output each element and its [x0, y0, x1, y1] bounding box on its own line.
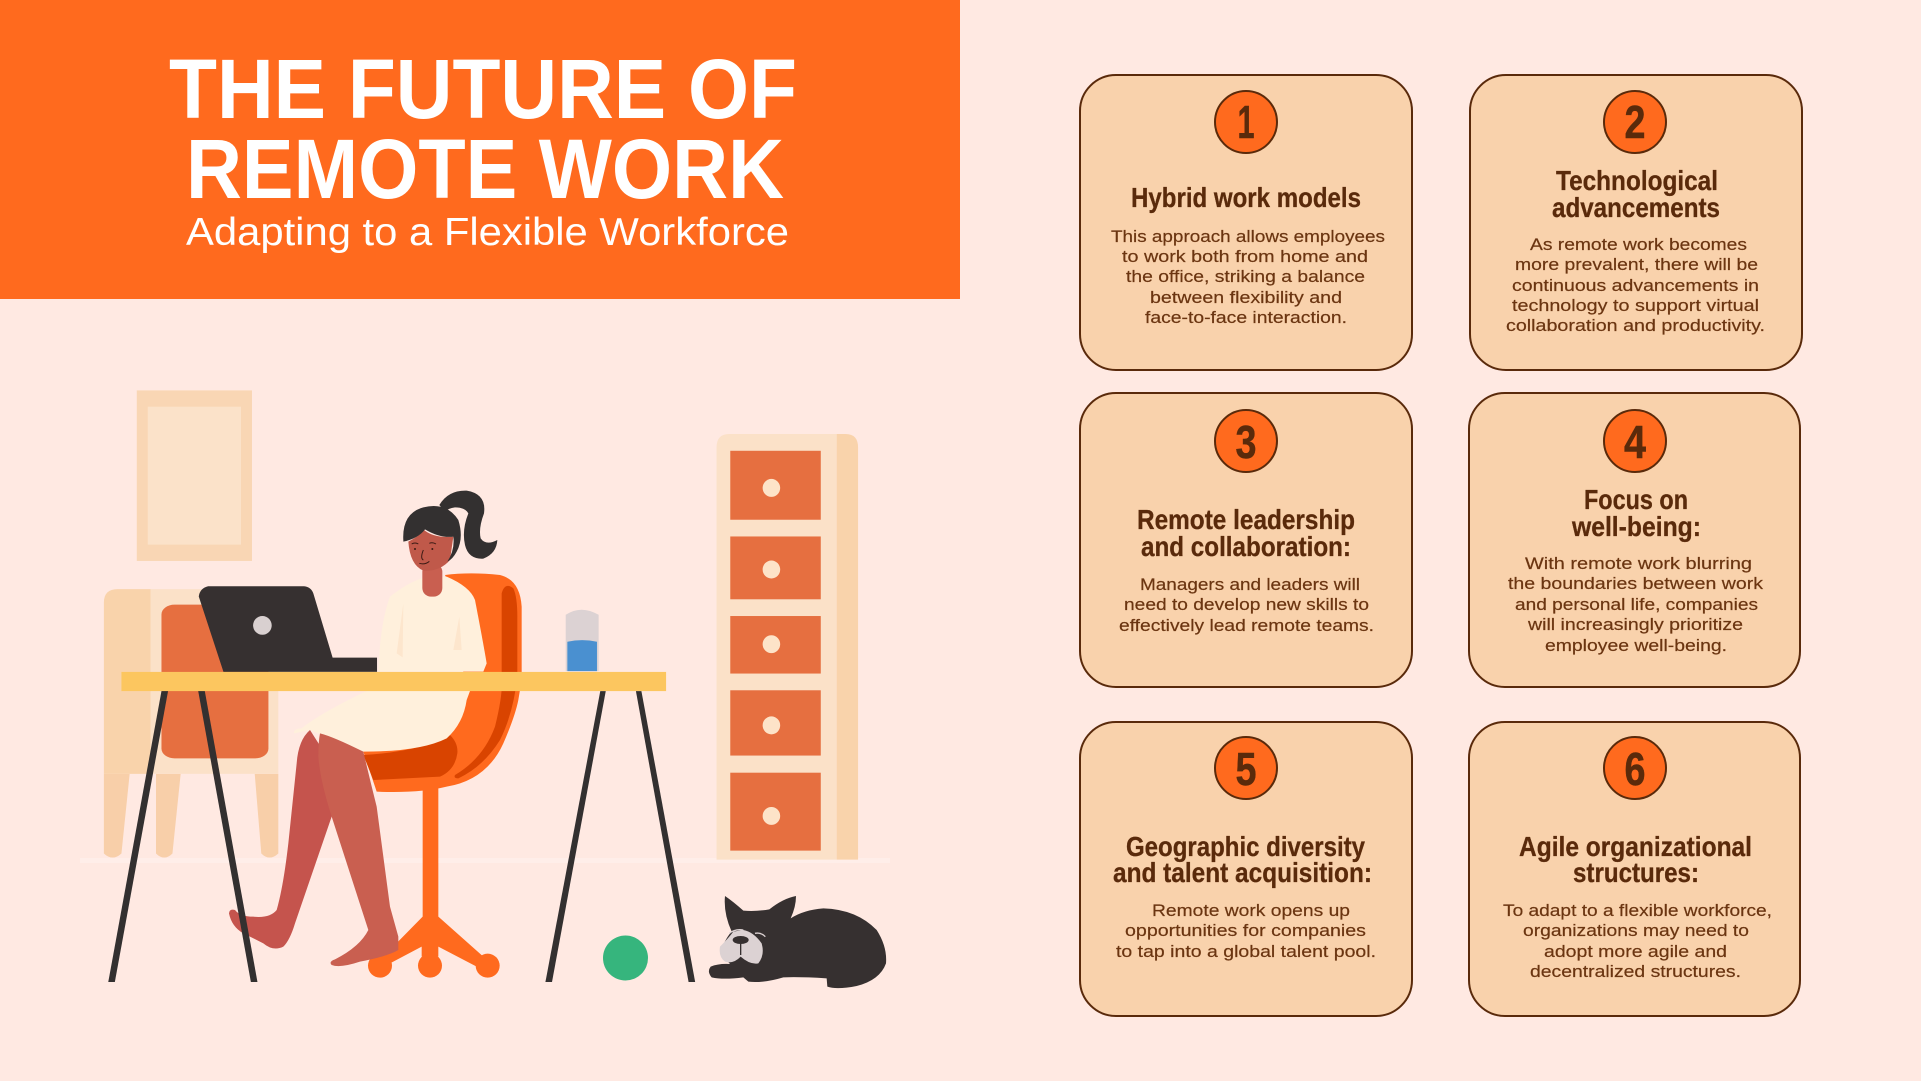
- body text: face-to-face interaction.: [1145, 308, 1347, 327]
- number badge 3: [1215, 410, 1277, 472]
- body text: more prevalent, there will be: [1515, 255, 1758, 274]
- body text: adopt more agile and: [1544, 942, 1727, 961]
- sleeping dog: [709, 896, 886, 988]
- body and legs: [229, 577, 487, 966]
- body text: With remote work blurring: [1525, 554, 1752, 573]
- title: [169, 42, 797, 216]
- body text: [1503, 901, 1772, 981]
- card 2: technological advancements: [1470, 75, 1802, 370]
- desk: [108, 672, 695, 982]
- body text: will increasingly prioritize: [1527, 615, 1743, 634]
- heading: Technological: [1556, 165, 1718, 196]
- heading: well-being:: [1571, 511, 1701, 542]
- body text: collaboration and productivity.: [1506, 316, 1765, 335]
- body text: [1119, 575, 1374, 635]
- heading: [1571, 484, 1701, 542]
- body text: Remote work opens up: [1152, 901, 1350, 920]
- heading: [1552, 165, 1720, 223]
- heading: Geographic diversity: [1126, 831, 1365, 862]
- body text: technology to support virtual: [1512, 296, 1759, 315]
- water glass: [566, 610, 599, 671]
- heading: [1519, 831, 1752, 888]
- number badge 6: [1604, 737, 1666, 799]
- number badge 4: [1604, 410, 1666, 472]
- drawer cabinet: [717, 434, 858, 860]
- wall frame: [137, 390, 252, 561]
- body text: opportunities for companies: [1125, 921, 1366, 940]
- title: THE FUTURE OF: [169, 42, 797, 136]
- number badge 1: [1215, 91, 1277, 153]
- number badge 2: 2: [1624, 96, 1646, 148]
- number badge 5: [1215, 737, 1277, 799]
- card 3: remote leadership: [1080, 393, 1412, 687]
- heading: advancements: [1552, 192, 1720, 223]
- body text: and personal life, companies: [1515, 595, 1758, 614]
- body text: Managers and leaders will: [1140, 575, 1360, 594]
- heading: and collaboration:: [1141, 531, 1351, 562]
- header banner: [0, 0, 960, 299]
- body text: to work both from home and: [1122, 247, 1368, 266]
- card 1: hybrid work models: [1080, 75, 1412, 370]
- body text: [1116, 901, 1376, 961]
- illustration: woman working from home: [80, 390, 890, 988]
- body text: organizations may need to: [1523, 921, 1749, 940]
- heading: structures:: [1573, 857, 1699, 888]
- body text: To adapt to a flexible workforce,: [1503, 901, 1772, 920]
- heading: Agile organizational: [1519, 831, 1752, 862]
- body text: the office, striking a balance: [1126, 267, 1365, 286]
- number badge 5: 5: [1236, 743, 1256, 795]
- heading: [1113, 831, 1372, 888]
- heading: Hybrid work models: [1131, 182, 1361, 213]
- body text: [1111, 227, 1385, 327]
- subtitle: Adapting to a Flexible Workforce: [186, 211, 789, 254]
- laptop: [199, 586, 377, 672]
- body text: [1508, 554, 1764, 655]
- body text: As remote work becomes: [1530, 235, 1747, 254]
- heading: Focus on: [1584, 484, 1688, 515]
- body text: to tap into a global talent pool.: [1116, 942, 1376, 961]
- number badge 1: 1: [1238, 96, 1254, 148]
- body text: the boundaries between work: [1508, 574, 1764, 593]
- card 5: geographic diversity: [1080, 722, 1412, 1016]
- office chair: [363, 573, 522, 978]
- number badge 6: 6: [1624, 743, 1646, 795]
- card 4: focus on well-being: [1469, 393, 1800, 687]
- body text: employee well-being.: [1545, 636, 1727, 655]
- heading: Remote leadership: [1137, 504, 1355, 535]
- title: REMOTE WORK: [186, 122, 784, 216]
- green ball: [603, 936, 648, 980]
- body text: continuous advancements in: [1512, 276, 1759, 295]
- heading: and talent acquisition:: [1113, 857, 1372, 888]
- body text: decentralized structures.: [1530, 962, 1741, 981]
- woman: [229, 491, 497, 966]
- armchair: [104, 589, 278, 858]
- body text: This approach allows employees: [1111, 227, 1385, 246]
- heading: [1137, 504, 1355, 562]
- body text: [1506, 235, 1765, 335]
- number badge 4: 4: [1624, 416, 1646, 468]
- body text: need to develop new skills to: [1124, 595, 1369, 614]
- head and hair: [403, 491, 497, 597]
- card 6: agile organizational structures: [1469, 722, 1800, 1016]
- body text: between flexibility and: [1150, 288, 1342, 307]
- body text: effectively lead remote teams.: [1119, 616, 1374, 635]
- number badge 2: [1604, 91, 1666, 153]
- number badge 3: 3: [1236, 416, 1256, 468]
